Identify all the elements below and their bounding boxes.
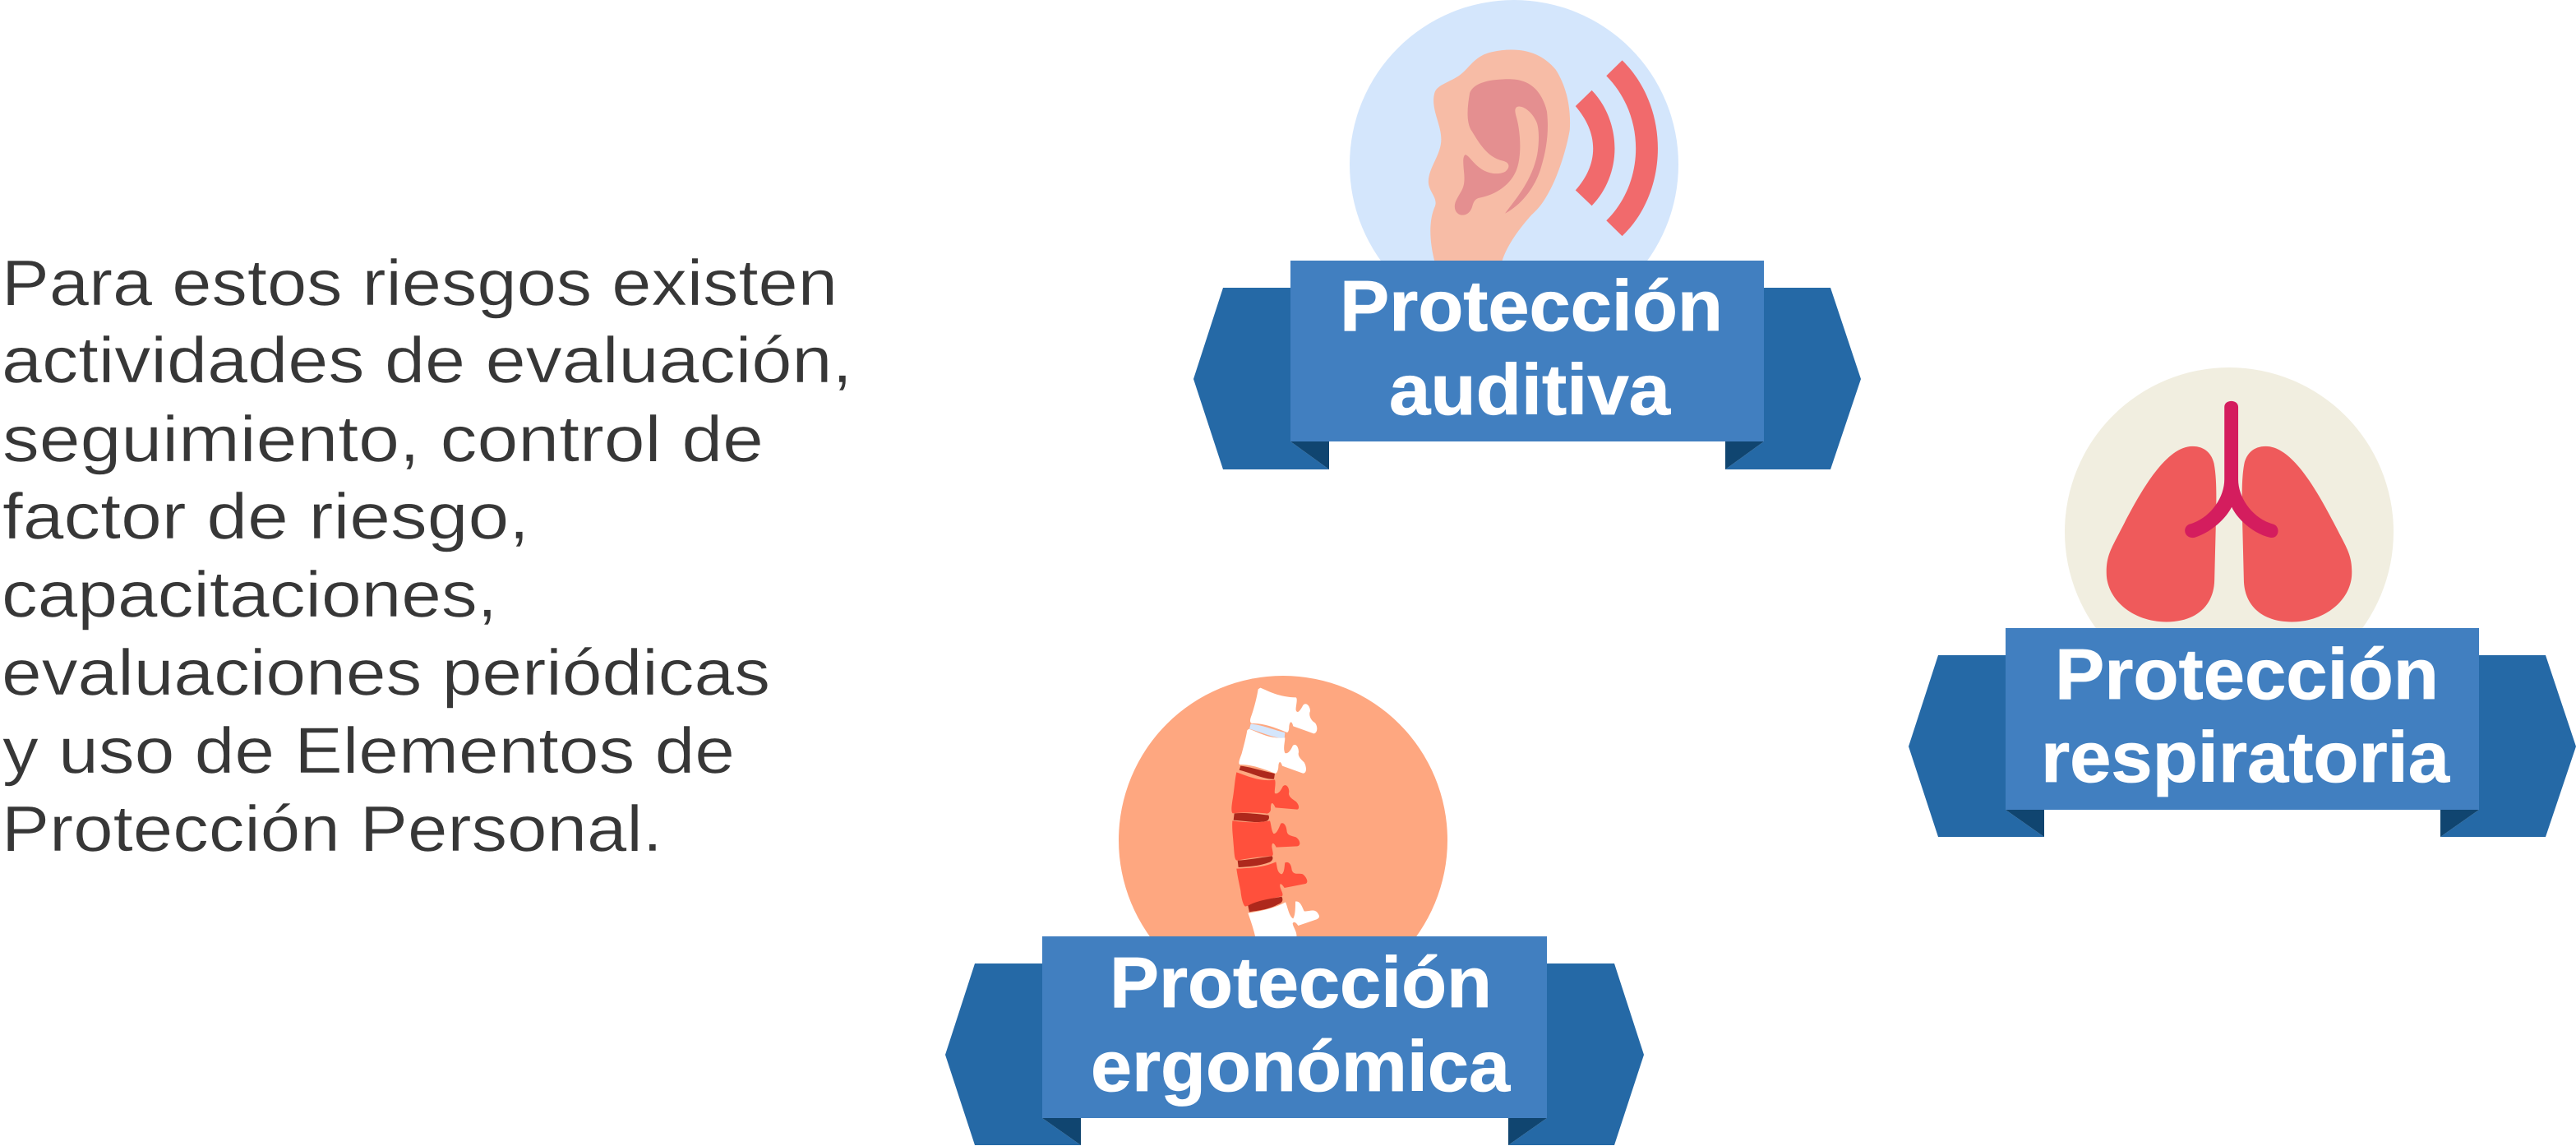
icon: ear background circle [1350, 0, 1678, 329]
text block: intro paragraph [2, 246, 852, 865]
ribbon: respiratoria: respiratoria [2041, 718, 2450, 797]
text block: intro paragraph: factor de riesgo, [2, 479, 529, 552]
ribbon: ergonómica: ergonómica [1091, 1027, 1511, 1107]
icon: spine background circle [1119, 676, 1447, 1005]
ribbon: ergonómica: Protección [1110, 943, 1492, 1023]
icon: lungs background circle [2065, 367, 2394, 696]
ribbon: auditiva [1193, 261, 1861, 469]
panel: protección ergonómica [945, 676, 1644, 1145]
ribbon: respiratoria [1909, 628, 2576, 837]
ribbon: auditiva: auditiva [1389, 350, 1671, 430]
icon: lungs [2107, 401, 2352, 622]
icon: ear with sound waves [1429, 50, 1658, 261]
text block: intro paragraph: seguimiento, control de [2, 402, 764, 475]
text block: intro paragraph: Para estos riesgos existen [2, 246, 838, 319]
icon: spine [1231, 688, 1319, 937]
ribbon: respiratoria: Protección [2055, 635, 2439, 714]
text block: intro paragraph: Protección Personal. [2, 792, 662, 865]
text block: intro paragraph: capacitaciones, [2, 557, 497, 631]
text block: intro paragraph: actividades de evaluación, [2, 323, 852, 396]
ribbon: auditiva: Protección [1340, 266, 1723, 346]
text block: intro paragraph: evaluaciones periódicas [2, 635, 770, 709]
panel: protección respiratoria [1909, 367, 2576, 837]
text block: intro paragraph: y uso de Elementos de [2, 714, 735, 787]
ribbon: ergonómica [945, 936, 1644, 1145]
panel: protección auditiva [1193, 0, 1861, 469]
